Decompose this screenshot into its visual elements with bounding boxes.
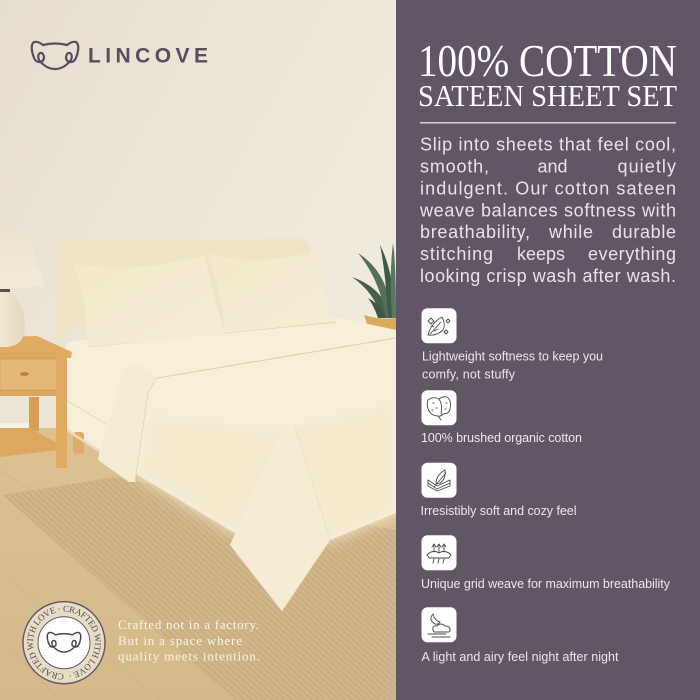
pillows [73, 250, 332, 347]
headboard [56, 239, 310, 345]
craft caption: But in a space where [118, 633, 242, 648]
icon: feather [428, 317, 450, 335]
bed skirt seam [66, 400, 106, 424]
feature: lightweight: Lightweight softness to keep you [422, 350, 603, 364]
description: and [538, 156, 568, 176]
icon: cotton boll [427, 397, 451, 420]
description: looking crisp wash after wash. [420, 266, 676, 286]
description: everything [588, 244, 676, 264]
feature: lightweight: comfy, not stuffy [422, 368, 516, 382]
craft caption: Crafted not in a factory. [118, 617, 259, 632]
brand logo [32, 42, 208, 69]
feature: breathable [421, 535, 671, 591]
description: while [548, 222, 593, 242]
feature: breathable: Unique grid weave for maximum breathability [421, 577, 671, 591]
craft caption: quality meets intention. [118, 648, 260, 664]
bed side shading [138, 402, 396, 540]
feature: soft: Irresistibly soft and cozy feel [420, 504, 576, 518]
feature: cotton [421, 390, 582, 445]
corner drape [230, 427, 330, 611]
icon: feather on cloth [428, 470, 450, 491]
description: Slip into sheets that feel cool, [420, 135, 676, 155]
description: indulgent. Our cotton sateen [420, 178, 676, 198]
description: weave balances softness with [419, 200, 676, 220]
feature: night [422, 607, 619, 664]
craft badge: CRAFTED WITH LOVE · CRAFTED WITH LOVE · [26, 606, 102, 680]
bed leg [73, 432, 84, 454]
panel: bedroom scene [0, 0, 396, 700]
description: keeps [517, 244, 565, 264]
plant [352, 243, 396, 331]
description: durable [612, 222, 676, 242]
rug [3, 477, 396, 700]
feature: soft [420, 463, 576, 518]
description: stitching [420, 244, 493, 264]
description: smooth, [420, 156, 489, 176]
title: SATEEN SHEET SET [418, 78, 677, 113]
floor [0, 423, 396, 700]
bed base [66, 318, 396, 540]
sheet fold line [157, 338, 396, 378]
feature: night: A light and airy feel night after night [422, 650, 619, 664]
title [418, 36, 677, 113]
description: quietly [618, 156, 676, 176]
nightstand [0, 336, 72, 468]
table lamp [0, 229, 45, 347]
icon: bear logo [32, 42, 78, 69]
craft caption [118, 617, 260, 664]
description: breathability, [420, 222, 530, 242]
icon: airflow weave [427, 544, 451, 563]
wordmark: LINCOVE [88, 44, 208, 68]
icon: moon and cloud [428, 614, 450, 637]
feature: cotton: 100% brushed organic cotton [421, 431, 582, 445]
description [419, 135, 676, 286]
panel: purple content [396, 0, 700, 700]
left sheet drape [98, 365, 157, 482]
feature: lightweight [422, 308, 603, 382]
